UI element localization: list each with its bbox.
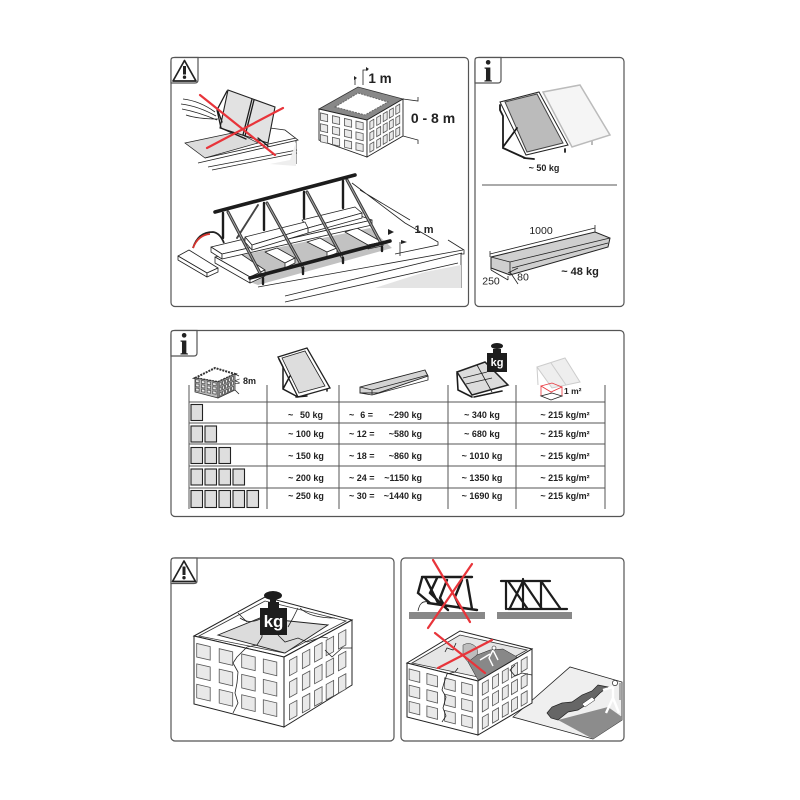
icon: info tab: i (484, 54, 493, 88)
header icon: collector (278, 348, 330, 397)
header icon: building up to 8 m: ≤ (235, 376, 240, 386)
table values: ~ 200 kg (288, 473, 324, 483)
ballast block (178, 250, 218, 277)
dimension: 250: 250 (482, 276, 500, 288)
table values: ~ 340 kg (464, 410, 500, 420)
top rail (215, 175, 355, 212)
icon: info tab (475, 54, 501, 88)
header icon: one square metre (537, 358, 582, 400)
icon: red cross (200, 95, 283, 155)
header icon: collector with ballast and weight (457, 343, 508, 397)
illustration: sheet with fallen person (513, 667, 622, 739)
table values: ~ 18 = (349, 451, 375, 461)
icon: red cross (428, 560, 472, 628)
table values: ~ 215 kg/m² (540, 429, 590, 439)
red cable (193, 232, 224, 248)
illustration: panel on roof edge crossed out (181, 90, 298, 170)
table values: ~ 100 kg (288, 429, 324, 439)
panel: overload warning (171, 558, 394, 741)
table values: ~ 30 = (349, 491, 375, 501)
table values: ~ 12 = (349, 429, 375, 439)
person (603, 680, 620, 713)
table values: ~ 215 kg/m² (540, 410, 590, 420)
illustration: ballast block with dimensions (482, 225, 610, 288)
panel: edge distance warning (171, 58, 468, 306)
icon: info tab: i (180, 326, 189, 362)
header icon: ballast block (360, 370, 428, 395)
icon: red cross (435, 633, 492, 673)
cracks (233, 608, 352, 713)
illustration: damaged frame crossed out (409, 560, 485, 628)
row icons: number of collectors (191, 404, 258, 508)
table values: ~ 680 kg (464, 429, 500, 439)
table values: ~1440 kg (384, 491, 422, 501)
illustration: correct frame (497, 579, 572, 619)
table grid (189, 385, 605, 509)
table values: ~ 250 kg (288, 491, 324, 501)
weight: kg (264, 612, 283, 631)
dimension: 1 m: 1 m (415, 224, 434, 236)
weight (260, 591, 287, 635)
table values: ~ 1690 kg (462, 491, 502, 501)
table values: 6 = (360, 410, 373, 420)
dimension: 1 m: 1 m (368, 71, 392, 86)
dimension: 0 - 8 m: 0 - 8 m (411, 110, 455, 126)
illustration: frame with ballast blocks on roof (178, 175, 464, 302)
illustration: building with 1 m edge zone (319, 67, 455, 157)
table values (288, 410, 590, 501)
table values: 50 kg (300, 410, 323, 420)
bottom rail (250, 241, 390, 278)
icon: info tab (171, 326, 197, 362)
table values: ~860 kg (389, 451, 422, 461)
header icon: building up to 8 m (195, 368, 256, 398)
weight label: ~ 50 kg (529, 163, 559, 173)
table values: ~ 1350 kg (462, 473, 502, 483)
table values: ~ 215 kg/m² (540, 451, 590, 461)
table values: ~ 215 kg/m² (540, 473, 590, 483)
header icon: one square metre: 1 m² (564, 386, 582, 396)
illustration: solar collector on frame (500, 85, 610, 173)
header icon: collector with ballast and weight: kg (491, 357, 503, 369)
dimension: 1000: 1000 (529, 225, 553, 237)
table values: ~1150 kg (384, 473, 422, 483)
dimension: 80: 80 (517, 272, 529, 284)
weight label: ~ 48 kg (561, 266, 599, 278)
illustration: overloaded cracked building (194, 591, 352, 727)
illustration: collapsed building (407, 631, 532, 735)
table values: ~ (288, 410, 293, 420)
table values: ~ 1010 kg (462, 451, 502, 461)
panel: collapse consequences (401, 558, 624, 741)
icon: warning tab (171, 58, 198, 83)
table values: ~ 24 = (349, 473, 375, 483)
table values: ~580 kg (389, 429, 422, 439)
table values: ~ (349, 410, 354, 420)
cracks (442, 643, 532, 722)
table values: ~290 kg (389, 410, 422, 420)
table values: ~ 215 kg/m² (540, 491, 590, 501)
panel: component weights (475, 54, 624, 306)
table values: ~ 150 kg (288, 451, 324, 461)
panel: load table (171, 326, 624, 516)
header icon: building up to 8 m: 8m (243, 376, 256, 386)
icon: warning tab (171, 558, 197, 584)
